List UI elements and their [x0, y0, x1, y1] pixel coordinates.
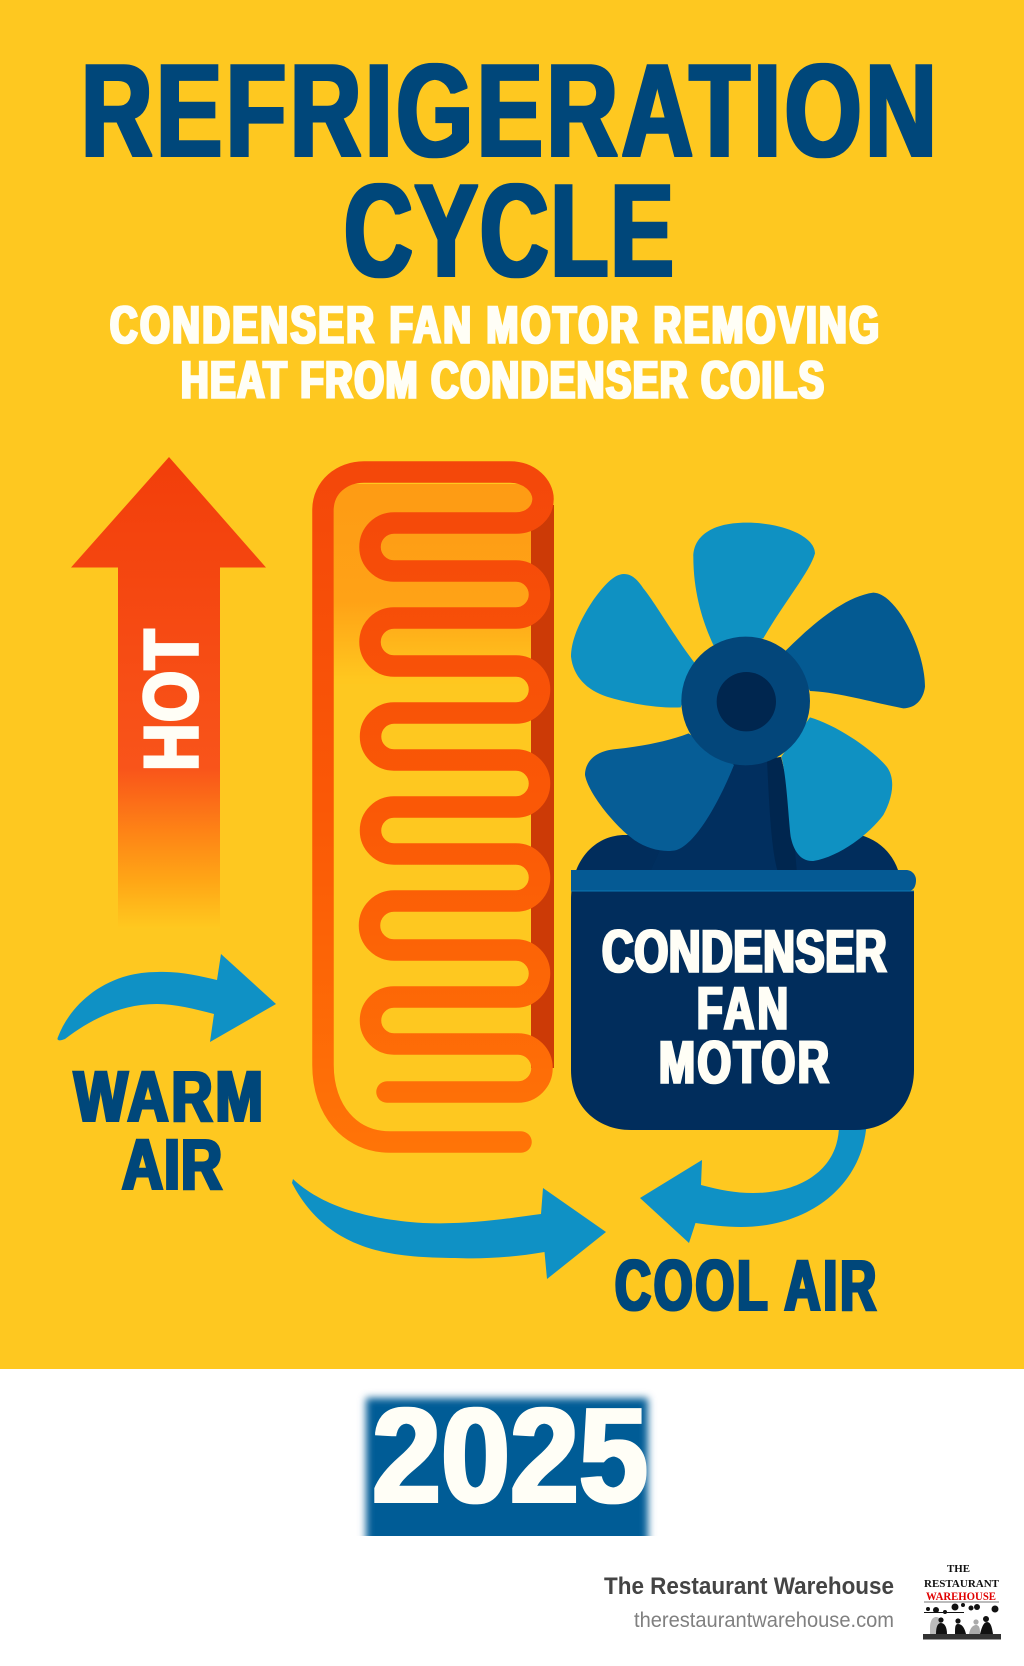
logo: [923, 1563, 1001, 1640]
fan blade: right: [786, 593, 925, 708]
label: warm air: WARM: [74, 1057, 263, 1136]
arrow: hot air rising: [71, 457, 266, 928]
label: warm air: [74, 1057, 263, 1204]
fan stand shadow: [767, 757, 797, 872]
arrow: cool air passing under coil: [292, 1179, 606, 1279]
motor label: CONDENSER: [602, 918, 887, 986]
motor label: MOTOR: [659, 1030, 829, 1097]
motor label: FAN: [697, 975, 788, 1042]
arrow: cool air from motor: [640, 1125, 866, 1243]
fan hub: [681, 637, 810, 765]
subtitle: CONDENSER FAN MOTOR REMOVING: [110, 295, 879, 354]
title: REFRIGERATION: [81, 36, 937, 184]
fan blade: left: [571, 574, 695, 708]
coil tube: [323, 472, 543, 1142]
fan blade: bottom right: [781, 717, 892, 861]
motor label: [602, 918, 887, 1097]
logo silhouette scene: [923, 1602, 1001, 1640]
subtitle: [110, 295, 879, 409]
condenser fan and motor: [571, 523, 925, 1130]
fan hub centre: [717, 672, 776, 731]
year badge: [359, 1391, 655, 1536]
logo: RESTAURANT: [924, 1578, 1000, 1590]
condenser coil: [323, 472, 554, 1142]
subtitle: HEAT FROM CONDENSER COILS: [181, 350, 824, 409]
fan blade: top: [693, 523, 815, 645]
fan stand: [650, 757, 797, 872]
year badge background: [359, 1391, 655, 1536]
label: HOT: HOT: [129, 629, 213, 771]
fan blade: bottom left: [585, 733, 734, 851]
logo: WAREHOUSE: [926, 1589, 996, 1603]
title: [81, 36, 937, 305]
motor housing dome: [571, 835, 914, 1130]
footer website: therestaurantwarehouse.com: [634, 1609, 894, 1632]
logo: THE: [947, 1563, 970, 1575]
year: 2025: [372, 1381, 648, 1531]
label: warm air: AIR: [122, 1125, 222, 1204]
footer brand name: The Restaurant Warehouse: [604, 1573, 894, 1600]
label: cool air: COOL AIR: [615, 1246, 876, 1325]
fan blades and hub: [571, 523, 925, 861]
title: CYCLE: [344, 158, 674, 305]
arrow: warm air entering: [57, 954, 276, 1042]
coil shadow strip: [531, 505, 554, 1068]
motor band: [571, 870, 916, 891]
coil inner glow: [334, 484, 532, 684]
